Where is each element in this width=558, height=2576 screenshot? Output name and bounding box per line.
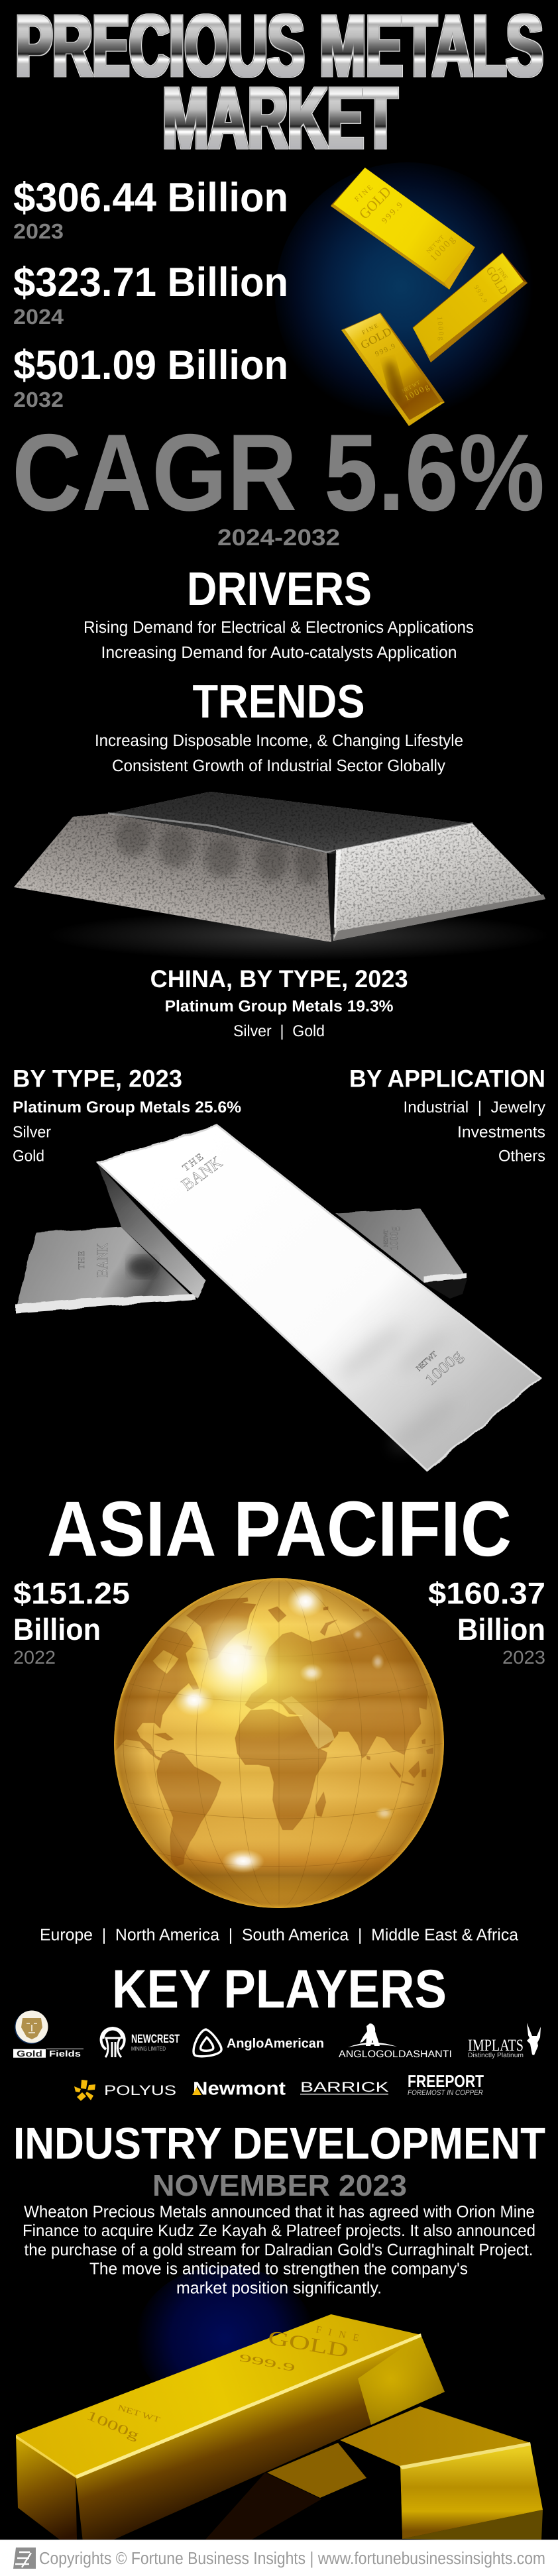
drivers	[84, 563, 474, 662]
market size figures	[13, 175, 288, 411]
by type: Platinum Group Metals 25.6%	[13, 1099, 241, 1116]
title: MARKET	[163, 69, 398, 167]
image: three gold bars on navy glow	[275, 162, 540, 427]
image: gold bars	[16, 2266, 543, 2540]
title	[16, 0, 543, 167]
image: three gold bars on navy glow: 999.9	[379, 200, 404, 225]
logo: anglo american: AngloAmerican	[227, 2037, 324, 2051]
icon: fortune business insights logo	[13, 2548, 36, 2569]
china by type: Platinum Group Metals 19.3%	[165, 998, 394, 1015]
by application: BY APPLICATION	[349, 1065, 545, 1093]
logo: implats: IMPLATS	[468, 2037, 524, 2055]
by type: BY TYPE, 2023	[13, 1065, 182, 1093]
trends: Consistent Growth of Industrial Sector Globally	[112, 757, 445, 775]
date: NOVEMBER 2023	[152, 2169, 407, 2202]
logo: freeport	[408, 2071, 484, 2097]
china by type: CHINA, BY TYPE, 2023	[150, 965, 408, 993]
asia pacific 2022 value: 2022	[13, 1647, 56, 1668]
image: silver bars: BANK	[178, 1152, 226, 1195]
by application: Industrial | Jewelry	[403, 1099, 545, 1116]
logo: implats: Distinctly Platinum	[468, 2052, 524, 2059]
image: three gold bars on navy glow: FINE	[361, 322, 380, 336]
logo: freeport: FREEPORT	[408, 2071, 484, 2091]
development paragraph: the purchase of a gold stream for Dalradian Gold's Curraghinalt Project.	[24, 2241, 533, 2259]
market size figures: 2032	[13, 388, 64, 411]
development paragraph	[23, 2203, 535, 2298]
trends: TRENDS	[192, 676, 364, 728]
logo: anglo american	[194, 2029, 324, 2057]
logo: anglogold ashanti	[339, 2023, 452, 2060]
image: three gold bars on navy glow: GOLD	[484, 264, 511, 297]
logo: gold fields: Gold	[17, 2049, 42, 2059]
development paragraph: market position significantly.	[176, 2279, 382, 2298]
by type	[13, 1065, 241, 1165]
logo: barrick: BARRICK	[300, 2080, 388, 2095]
image: gold bars: NET WT	[117, 2402, 162, 2424]
image: silver bars: THE	[181, 1152, 205, 1173]
trends: Increasing Disposable Income, & Changing Lifestyle	[95, 731, 463, 750]
by application: Investments	[457, 1124, 545, 1141]
by application: Others	[498, 1148, 545, 1165]
logo: polyus: POLYUS	[104, 2083, 176, 2098]
trends	[95, 676, 463, 775]
image: three gold bars on navy glow: 1000g	[428, 234, 457, 264]
asia pacific 2022 value: $151.25	[13, 1576, 130, 1610]
market size figures: 2024	[13, 305, 64, 329]
market size figures: $306.44 Billion	[13, 175, 288, 221]
asia pacific 2022 value: Billion	[13, 1612, 101, 1646]
logo: freeport: FOREMOST IN COPPER	[408, 2089, 483, 2097]
china by type: Silver | Gold	[233, 1022, 325, 1040]
development paragraph: Wheaton Precious Metals announced that it has agreed with Orion Mine	[24, 2203, 535, 2222]
image: three gold bars on navy glow: FINE	[496, 266, 510, 281]
image: gold bars: 999.9	[238, 2352, 296, 2374]
by type: Gold	[13, 1148, 44, 1165]
by type: Silver	[13, 1124, 51, 1141]
image: three gold bars on navy glow: 999.9	[374, 342, 397, 358]
development paragraph: Finance to acquire Kudz Ze Kayah & Platreef projects. It also announced	[23, 2222, 535, 2240]
footer	[0, 2540, 558, 2576]
image: three gold bars on navy glow: GOLD	[356, 183, 394, 222]
image: three gold bars on navy glow: FINE	[353, 184, 374, 203]
logo: implats	[468, 2023, 541, 2059]
image: three gold bars on navy glow: NET WT	[425, 234, 445, 254]
drivers: DRIVERS	[187, 563, 372, 616]
asia pacific 2023 value	[428, 1576, 545, 1668]
heading: asia pacific: ASIA PACIFIC	[47, 1485, 512, 1573]
logo: newcrest: MINING LIMITED	[131, 2045, 166, 2052]
image: silver bars: NET WT	[382, 1230, 389, 1247]
market size figures: 2023	[13, 219, 64, 243]
asia pacific 2022 value	[13, 1576, 130, 1668]
image: three gold bars on navy glow: GOLD	[359, 325, 394, 352]
china by type	[150, 965, 408, 1040]
logo: barrick	[300, 2080, 388, 2095]
regions list: Europe | North America | South America | Middle East & Africa	[40, 1925, 518, 1944]
logo: newcrest	[101, 2028, 180, 2057]
image: gold bars: FINE	[315, 2324, 360, 2344]
market size figures: $501.09 Billion	[13, 343, 288, 388]
image: silver bars: BANK	[94, 1242, 111, 1277]
asia pacific 2023 value: Billion	[457, 1612, 545, 1646]
image: silver bars: 1000g	[422, 1347, 466, 1389]
logo: polyus	[74, 2080, 176, 2101]
drivers: Increasing Demand for Auto-catalysts Application	[101, 643, 457, 662]
asia pacific 2023 value: 2023	[502, 1647, 545, 1668]
image: three gold bars on navy glow: 999.9	[472, 284, 488, 304]
image: silver bars: THE	[76, 1251, 86, 1269]
image: raw silver ingot	[14, 792, 550, 961]
logo: gold fields	[13, 2010, 84, 2059]
image: silver bars: NET WT	[414, 1349, 439, 1373]
logo: newmont: Newmont	[193, 2078, 286, 2099]
CAGR figure: 2024-2032	[217, 525, 340, 551]
logo: newcrest: NEWCREST	[131, 2032, 180, 2045]
development paragraph: The move is anticipated to strengthen the company's	[89, 2260, 468, 2279]
by application	[349, 1065, 545, 1165]
image: three gold bars on navy glow: 1000g	[402, 381, 431, 403]
image: three gold bars on navy glow: 1000g	[435, 316, 445, 341]
image: silver bars: 1000g	[388, 1226, 400, 1250]
logo: gold fields: Fields	[49, 2049, 81, 2059]
image: three gold bars on navy glow: NET WT	[401, 380, 421, 394]
image: gold globe	[114, 1578, 444, 1908]
market size figures: $323.71 Billion	[13, 260, 288, 305]
image: silver bars	[15, 1126, 541, 1471]
image: gold bars: GOLD	[266, 2326, 351, 2362]
heading: key players: KEY PLAYERS	[112, 1959, 447, 2019]
image: gold bars: 1000g	[84, 2408, 141, 2443]
drivers: Rising Demand for Electrical & Electronics Applications	[84, 618, 474, 637]
logo: anglogold ashanti: ANGLOGOLDASHANTI	[339, 2049, 452, 2060]
asia pacific 2023 value: $160.37	[428, 1576, 545, 1610]
